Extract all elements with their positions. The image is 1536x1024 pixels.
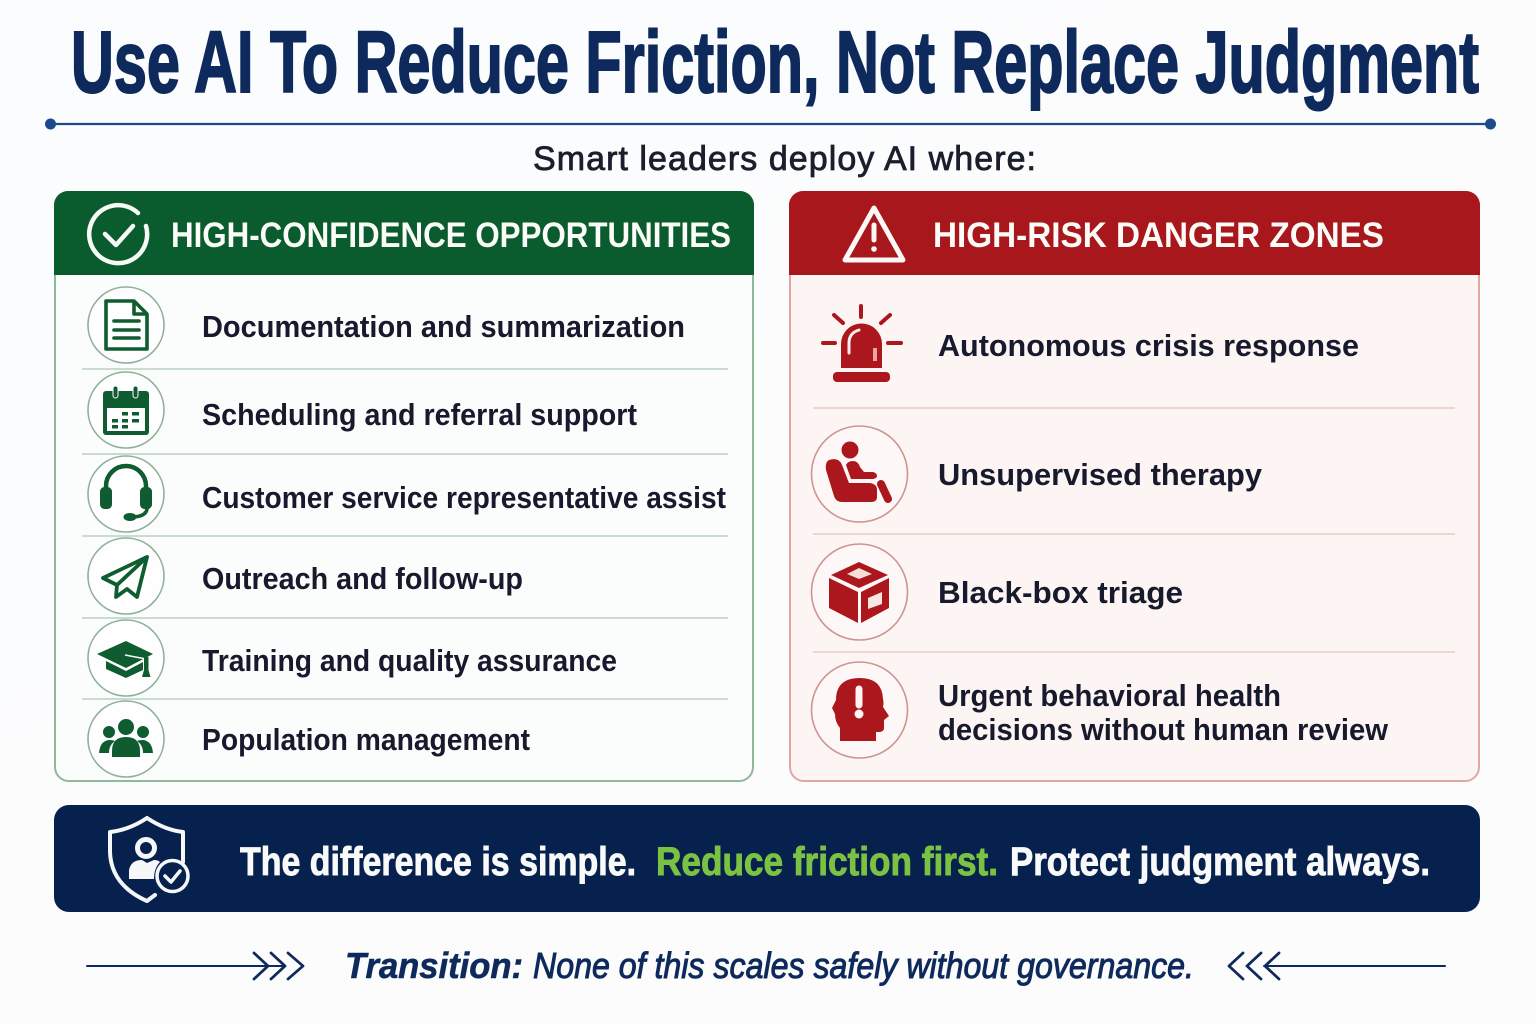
panel: high-risk danger zones [789, 191, 1480, 781]
row: documentation [88, 287, 685, 363]
row: customer service: Customer service representative assist [202, 480, 726, 515]
transition text: Transition: [345, 945, 523, 986]
transition text: None of this scales safely without governance. [533, 945, 1194, 986]
icon: check circle [89, 205, 147, 263]
row: scheduling [88, 372, 637, 448]
row: black-box triage [812, 544, 1183, 640]
row: population: Population management [202, 722, 530, 757]
banner text: Protect judgment always. [1010, 840, 1430, 884]
row: urgent decisions: decisions without human review [938, 712, 1389, 747]
row: urgent decisions [812, 662, 1389, 758]
row: crisis response [823, 306, 1359, 382]
row: outreach: Outreach and follow-up [202, 561, 523, 596]
row: customer service [88, 456, 726, 532]
arrow: right transition [1229, 953, 1445, 979]
row: training: Training and quality assurance [202, 643, 617, 678]
heading: danger zones: HIGH-RISK DANGER ZONES [933, 216, 1384, 255]
banner text: Reduce friction first. [656, 840, 998, 884]
row: scheduling: Scheduling and referral support [202, 397, 637, 432]
row dividers [82, 369, 728, 699]
icon: warning triangle [845, 208, 903, 260]
row: training [88, 620, 617, 696]
panel header: green [54, 191, 754, 275]
row: urgent decisions: Urgent behavioral health [938, 678, 1281, 713]
row: documentation: Documentation and summarization [202, 309, 685, 344]
row: unsupervised therapy [812, 426, 1263, 522]
banner [54, 805, 1480, 912]
arrow: left transition [87, 953, 303, 979]
row: population [88, 701, 530, 777]
row dividers [813, 408, 1455, 652]
icon: shield with person and check [110, 818, 188, 901]
banner text: The difference is simple. [240, 840, 636, 884]
subtitle: Smart leaders deploy AI where: [533, 140, 1036, 178]
banner text [240, 840, 1430, 884]
panel: high-confidence opportunities [54, 191, 754, 781]
row: outreach [88, 538, 523, 614]
row: crisis response: Autonomous crisis response [938, 328, 1359, 363]
row: unsupervised therapy: Unsupervised therapy [938, 457, 1263, 492]
title rule [45, 118, 1496, 130]
row: black-box triage: Black-box triage [938, 575, 1183, 610]
heading: opportunities: HIGH-CONFIDENCE OPPORTUNITIES [171, 216, 731, 255]
panel header: red [789, 191, 1480, 275]
